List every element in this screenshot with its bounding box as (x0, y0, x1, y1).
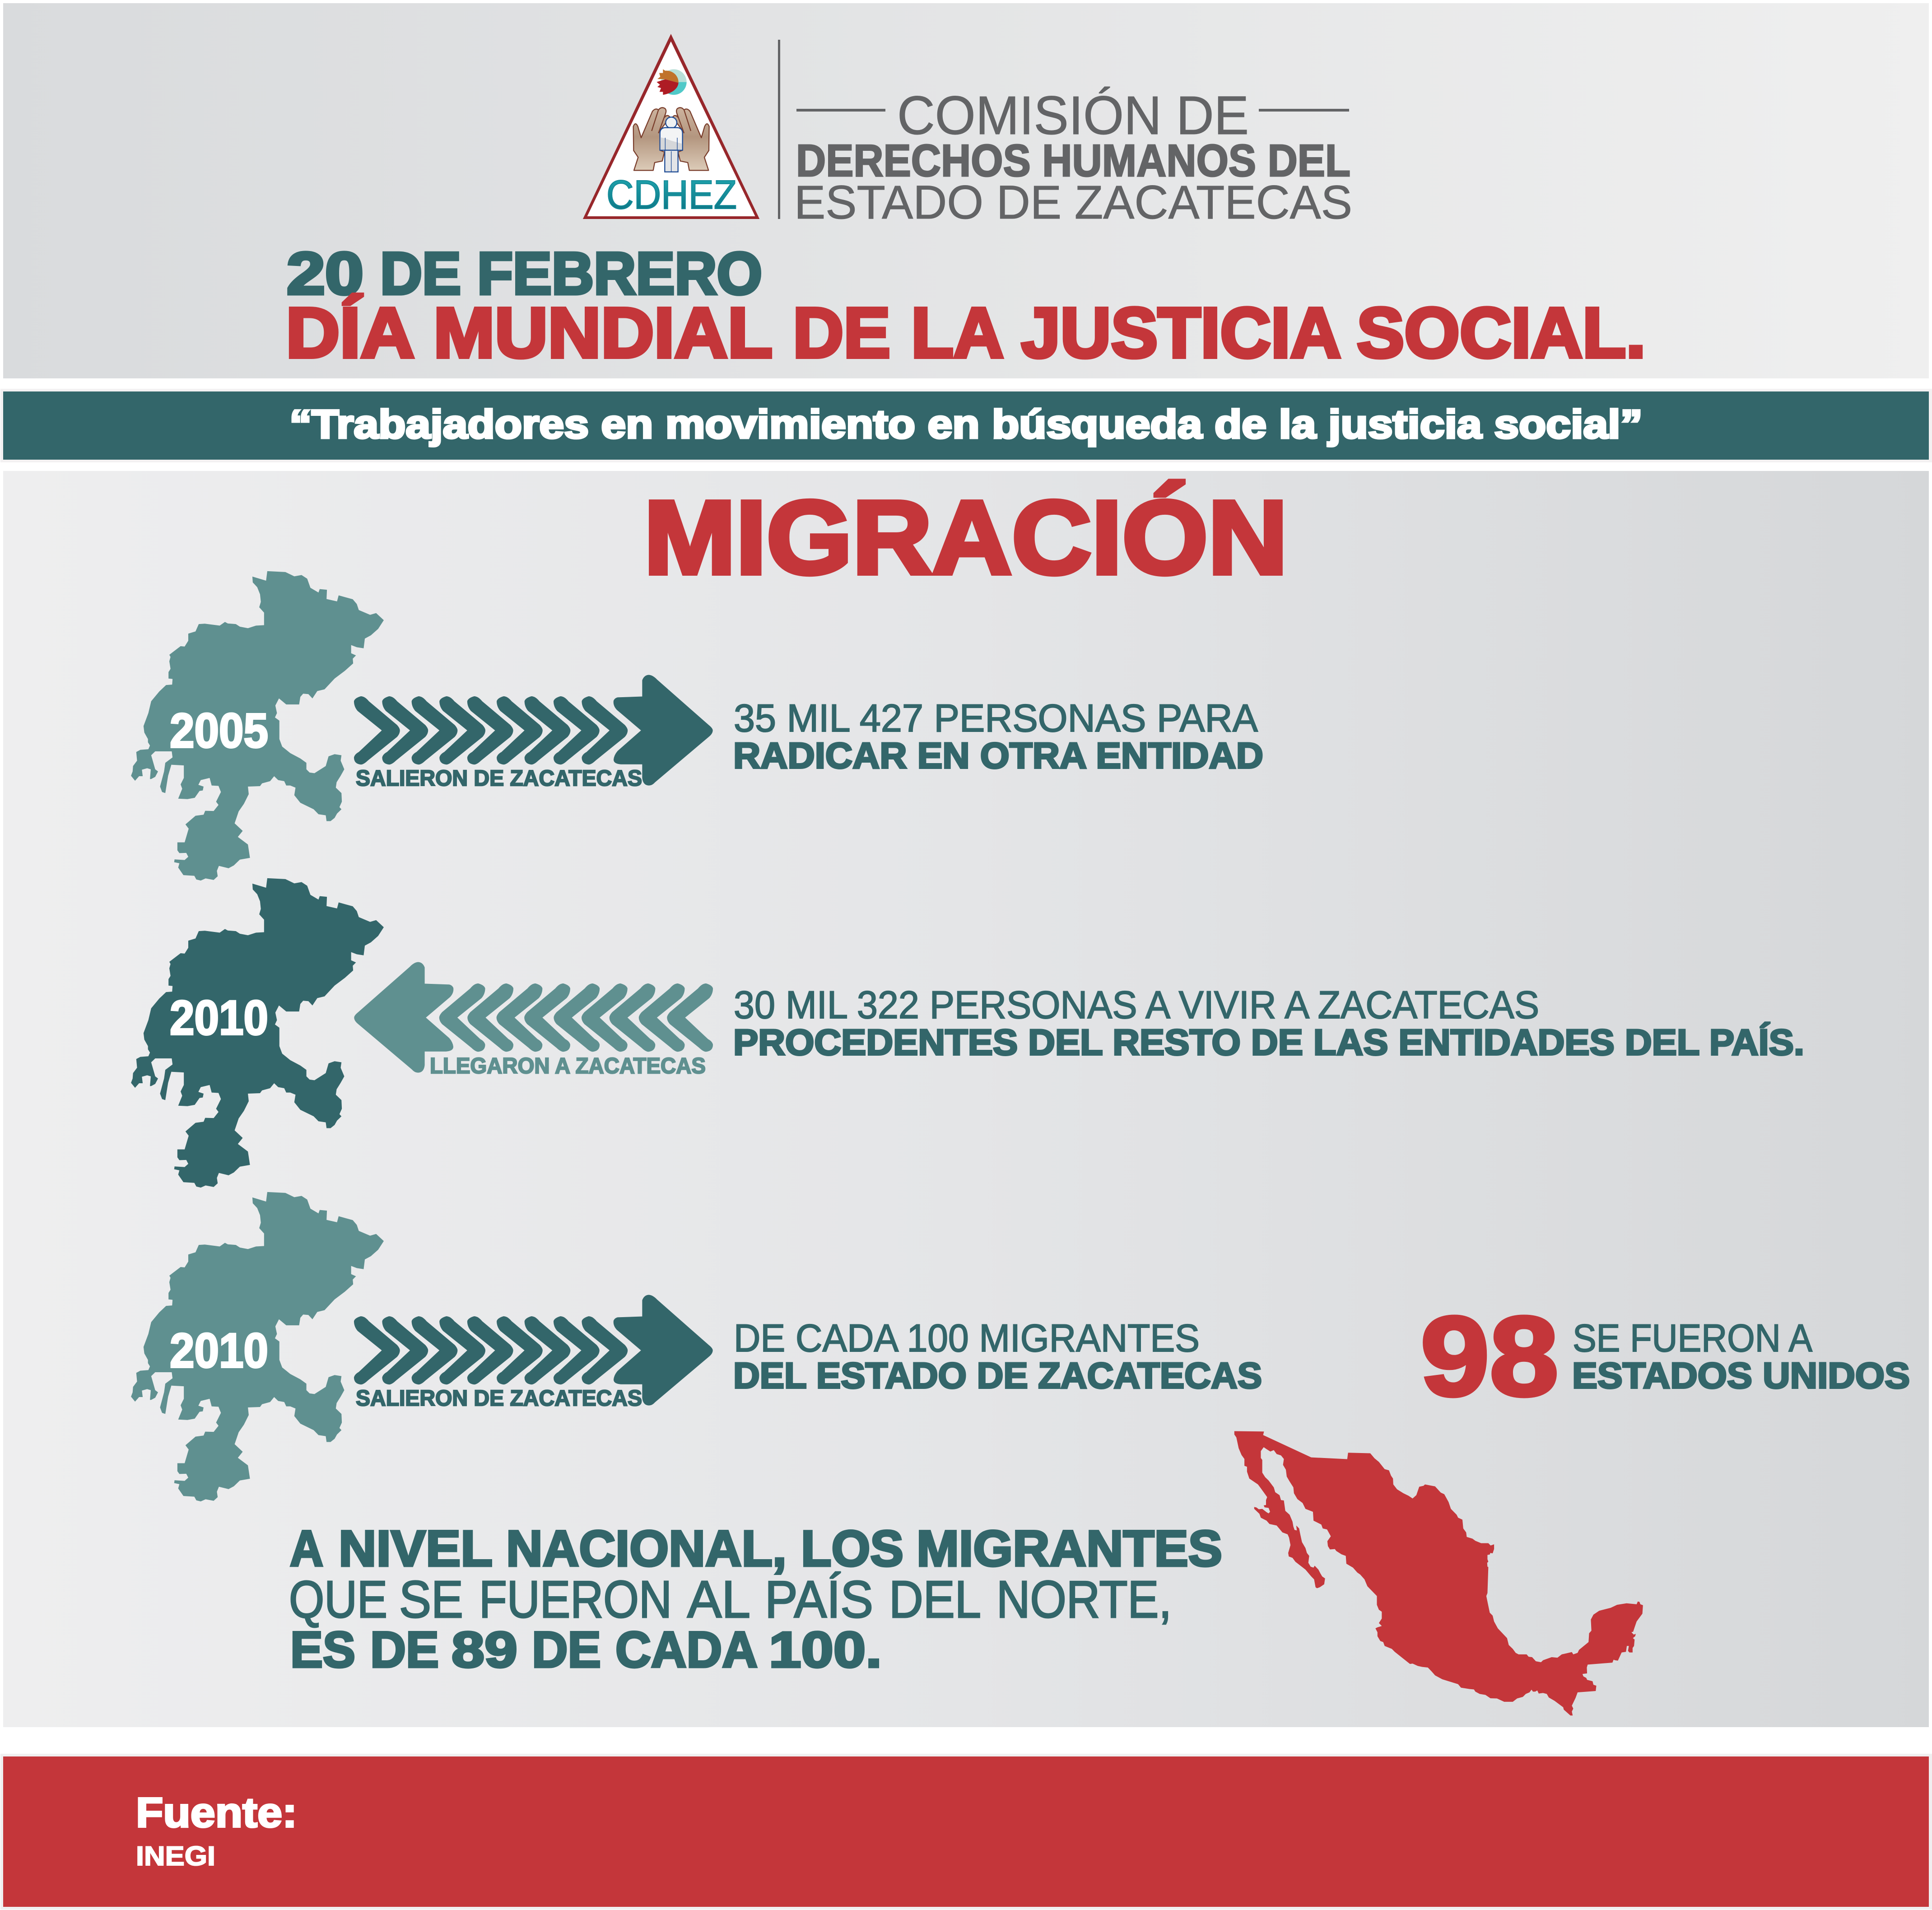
text: 100 migrants (733, 1317, 1262, 1396)
text: 2010 incoming stat: PROCEDENTES DEL RESTO DE LAS ENTIDADES DEL PAÍS. (733, 1022, 1804, 1063)
text: national level: DEL (889, 1570, 981, 1629)
logo: CDHEZ triangle (583, 34, 759, 219)
panel: migration (3, 471, 1929, 1727)
heading: date: DE (380, 240, 461, 307)
icon: hands (633, 107, 709, 170)
text: year 2005: 2005 (170, 703, 268, 758)
text: 2005 stat (733, 697, 1263, 776)
text: Comisión de: COMISIÓN DE (897, 84, 1249, 146)
footer: source (0, 1754, 1932, 1910)
text: national level (289, 1520, 1222, 1678)
text: national level: NIVEL (339, 1520, 493, 1577)
text: national level: CADA (615, 1621, 758, 1678)
label: salieron: SALIERON DE ZACATECAS (356, 766, 642, 791)
heading: date: 20 (287, 240, 363, 307)
text: year 2010: 2010 (170, 990, 268, 1045)
text: national level: AL (687, 1570, 750, 1629)
text: year 2010: 2010 (170, 1323, 268, 1378)
text: national level: QUE (289, 1570, 387, 1629)
text: national level: NACIONAL, (506, 1520, 787, 1577)
icon: person (660, 117, 683, 172)
heading: world day of social justice: MUNDIAL (433, 293, 773, 373)
text: national level: LOS (801, 1520, 903, 1577)
text: to United States: SE FUERON A (1573, 1317, 1813, 1360)
text: national level: 100. (769, 1621, 882, 1678)
text: national level: FUERON (479, 1570, 672, 1629)
text: national level: ES (290, 1621, 355, 1678)
heading: world day of social justice: LA (911, 293, 1004, 373)
text: INEGI: INEGI (136, 1841, 215, 1871)
heading: date (287, 240, 762, 307)
panel: header (3, 3, 1929, 378)
divider line (778, 40, 780, 219)
text: national level: SE (399, 1570, 463, 1629)
text: Comisión de (796, 84, 1349, 146)
heading: Migración: MIGRACIÓN (644, 479, 1288, 596)
text: national level: DE (370, 1621, 439, 1678)
text: to United States: ESTADOS UNIDOS (1572, 1356, 1910, 1396)
heading: world day of social justice: JUSTICIA (1021, 293, 1341, 373)
text: 2010 incoming stat: 30 MIL 322 PERSONAS A VIVIR A ZACATECAS (734, 983, 1539, 1027)
text: Fuente: Fuente: (136, 1789, 297, 1836)
text: 2005 stat: 35 MIL 427 PERSONAS PARA (734, 697, 1258, 740)
text: 2005 stat: RADICAR EN OTRA ENTIDAD (733, 736, 1263, 776)
text: Derechos Humanos del: DERECHOS HUMANOS DEL (796, 135, 1350, 186)
text: national level: A (290, 1520, 323, 1577)
stat: 98: 98 (1420, 1293, 1559, 1419)
map: Zacatecas 2010 incoming (131, 878, 384, 1188)
text: to United States (1572, 1317, 1910, 1396)
text: national level: NORTE, (996, 1570, 1172, 1629)
text: Estado de Zacatecas: ESTADO DE ZACATECAS (794, 176, 1352, 229)
text: national level: DE (532, 1621, 601, 1678)
icon: flame sun (656, 69, 687, 95)
heading: world day of social justice: DÍA (286, 293, 414, 373)
label: salieron: SALIERON DE ZACATECAS (356, 1386, 642, 1411)
arrow: outgoing 2010 (354, 1295, 713, 1411)
heading: world day of social justice: DE (793, 293, 890, 373)
text: 2010 incoming stat (733, 983, 1804, 1063)
arrow: incoming 2010 (354, 962, 713, 1078)
arrow: outgoing 2005 (354, 675, 713, 791)
text: 100 migrants: DEL ESTADO DE ZACATECAS (733, 1356, 1262, 1396)
heading: world day of social justice (286, 293, 1646, 373)
map: Zacatecas 2010 outgoing (131, 1192, 384, 1501)
text: national level: MIGRANTES (917, 1520, 1222, 1577)
map: Zacatecas 2005 (131, 571, 384, 880)
text: CDHEZ: CDHEZ (606, 172, 737, 218)
heading: date: FEBRERO (477, 240, 762, 307)
text: national level: 89 (452, 1621, 517, 1678)
text: national level: PAÍS (765, 1570, 873, 1629)
text: 100 migrants: DE CADA 100 MIGRANTES (734, 1317, 1200, 1360)
map: Mexico (1234, 1431, 1643, 1715)
heading: world day of social justice: SOCIAL. (1357, 293, 1646, 373)
label: llegaron: LLEGARON A ZACATECAS (430, 1054, 706, 1078)
text: slogan: “Trabajadores en movimiento en búsqueda de la justicia social” (289, 401, 1643, 447)
banner: slogan (0, 389, 1932, 462)
